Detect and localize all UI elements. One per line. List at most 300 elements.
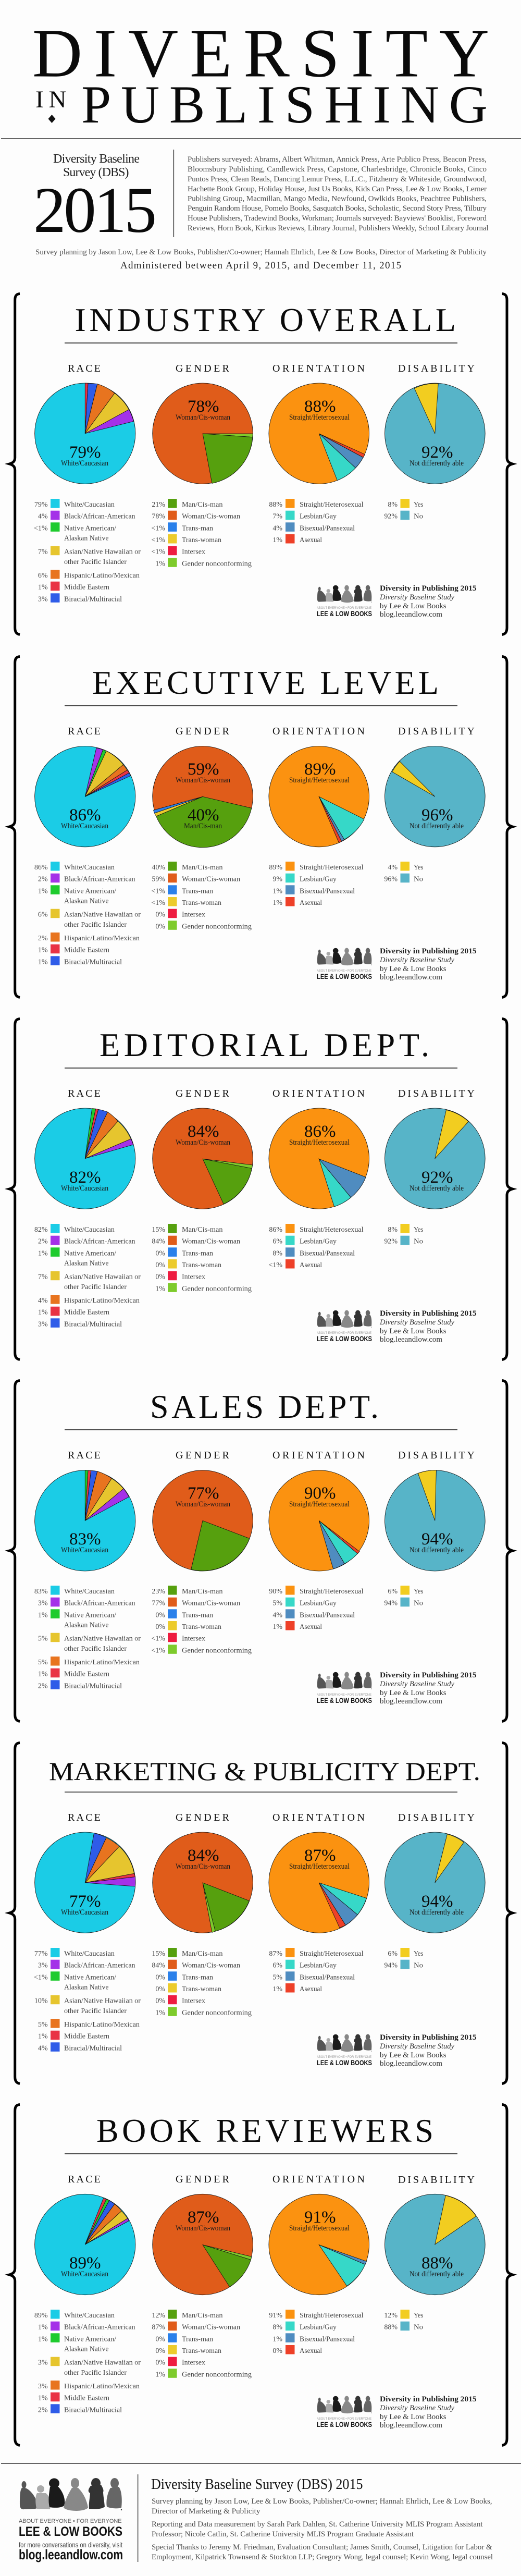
gender legend: 0% bbox=[155, 923, 165, 930]
race legend: 3% bbox=[38, 2383, 48, 2390]
gender legend: Intersex bbox=[182, 2359, 205, 2367]
race legend: Biracial/Multiracial bbox=[64, 2044, 122, 2052]
disability pie chart bbox=[385, 1832, 485, 1933]
gender legend: 0% bbox=[155, 1249, 165, 1257]
study credit: Diversity in Publishing 2015 bbox=[380, 1671, 476, 1679]
study credit: Diversity in Publishing 2015 bbox=[380, 947, 476, 955]
orientation legend: 90% bbox=[269, 1588, 282, 1596]
gender legend: <1% bbox=[151, 1635, 165, 1643]
column headings: GENDER bbox=[176, 1450, 230, 1461]
column headings: DISABILITY bbox=[398, 726, 475, 737]
disability pie chart bbox=[385, 2194, 485, 2295]
panel: sales dept bbox=[9, 1380, 513, 1721]
race legend: 1% bbox=[38, 2324, 48, 2332]
race legend: 7% bbox=[38, 548, 48, 556]
race legend: Biracial/Multiracial bbox=[64, 1320, 122, 1328]
publishers surveyed list: Reviews, Horn Book, Kirkus Reviews, Library Journal, Publishers Weekly, School Library Journal bbox=[188, 224, 489, 232]
column headings bbox=[68, 1812, 475, 1823]
race legend: 7% bbox=[38, 1273, 48, 1281]
pie value labels: 84% bbox=[188, 1122, 219, 1141]
race legend: 4% bbox=[38, 1297, 48, 1305]
footer credits bbox=[152, 2497, 493, 2561]
race legend: Biracial/Multiracial bbox=[64, 2406, 122, 2414]
race legend: other Pacific Islander bbox=[64, 2007, 127, 2015]
column headings bbox=[68, 363, 475, 374]
logo: lee and low books: ABOUT EVERYONE • FOR EVERYONE bbox=[317, 1332, 371, 1335]
study credit: by Lee & Low Books bbox=[380, 965, 446, 973]
orientation legend: Lesbian/Gay bbox=[300, 513, 337, 521]
orientation pie chart bbox=[269, 746, 369, 847]
gender legend: Man/Cis-man bbox=[182, 864, 223, 872]
pie value labels: 84% bbox=[188, 1846, 219, 1865]
panel: book reviewers bbox=[9, 2105, 513, 2446]
race legend: 2% bbox=[38, 2406, 48, 2414]
gender legend: 1% bbox=[155, 560, 165, 568]
pie value labels: 89% bbox=[69, 2254, 101, 2273]
pie value labels: Not differently able bbox=[410, 2270, 464, 2278]
disability legend bbox=[384, 1586, 423, 1608]
heading: SALES DEPT. bbox=[150, 1388, 379, 1425]
column headings: ORIENTATION bbox=[272, 2174, 365, 2185]
pie value labels: White/Caucasian bbox=[61, 1184, 109, 1193]
study credit: blog.leeandlow.com bbox=[380, 610, 442, 619]
orientation legend: 88% bbox=[269, 501, 282, 509]
pie value labels: 77% bbox=[188, 1484, 219, 1503]
column headings bbox=[68, 726, 475, 737]
publishers surveyed list: Puntos Press, Clean Reads, Dancing Lemur Press, L.L.C., Fitzhenry & Whiteside, Groundwood, bbox=[188, 175, 487, 183]
disability legend: No bbox=[414, 513, 423, 521]
heading: BOOK REVIEWERS bbox=[96, 2112, 433, 2149]
study credit: blog.leeandlow.com bbox=[380, 973, 442, 982]
race legend: Alaskan Native bbox=[64, 898, 108, 905]
gender legend: 0% bbox=[155, 1973, 165, 1981]
pie value labels: 82% bbox=[69, 1168, 101, 1187]
race legend: Middle Eastern bbox=[64, 2395, 109, 2402]
race legend: Asian/Native Hawaiian or bbox=[64, 1273, 141, 1281]
orientation legend: Lesbian/Gay bbox=[300, 1600, 337, 1608]
pie value labels bbox=[61, 1846, 464, 1917]
gender legend bbox=[152, 2310, 252, 2378]
orientation legend: Straight/Heterosexual bbox=[300, 1588, 364, 1596]
study credit: Diversity Baseline Study bbox=[379, 593, 454, 602]
study credit bbox=[379, 2395, 476, 2430]
disability legend: No bbox=[414, 1600, 423, 1608]
footer credits: Survey planning by Jason Low, Lee & Low Books, Publisher/Co-owner; Hannah Ehrlich, Lee & Low Books, bbox=[152, 2497, 492, 2506]
race legend: Hispanic/Latino/Mexican bbox=[64, 2383, 140, 2390]
disability legend: No bbox=[414, 1962, 423, 1970]
race legend: 86% bbox=[34, 864, 48, 872]
disability legend: No bbox=[414, 2324, 423, 2332]
gender legend: Woman/Cis-woman bbox=[182, 513, 240, 521]
gender legend: <1% bbox=[151, 536, 165, 544]
gender legend: Intersex bbox=[182, 548, 205, 556]
pie value labels: Straight/Heterosexual bbox=[289, 413, 350, 422]
gender pie chart bbox=[153, 746, 253, 848]
column headings: ORIENTATION bbox=[272, 726, 365, 737]
race legend: 1% bbox=[38, 1249, 48, 1257]
survey name and year: 2015 bbox=[33, 175, 157, 247]
gender legend: Trans-woman bbox=[182, 536, 221, 544]
column headings: GENDER bbox=[176, 2174, 230, 2185]
orientation legend: <1% bbox=[268, 1261, 282, 1269]
race legend: 2% bbox=[38, 1238, 48, 1246]
gender legend: 0% bbox=[155, 2347, 165, 2355]
disability legend: Yes bbox=[414, 1588, 423, 1596]
pie value labels: Straight/Heterosexual bbox=[289, 1862, 350, 1871]
gender legend: 0% bbox=[155, 2359, 165, 2367]
gender legend: Intersex bbox=[182, 1273, 205, 1281]
study credit: Diversity in Publishing 2015 bbox=[380, 584, 476, 593]
gender legend: Trans-woman bbox=[182, 1261, 221, 1269]
race legend: 77% bbox=[34, 1950, 48, 1958]
gender legend: <1% bbox=[151, 887, 165, 895]
orientation pie chart bbox=[269, 383, 369, 484]
column headings: DISABILITY bbox=[398, 1088, 475, 1099]
race legend: Alaskan Native bbox=[64, 535, 108, 542]
orientation pie chart bbox=[269, 2194, 369, 2295]
orientation legend: Bisexual/Pansexual bbox=[300, 2335, 355, 2343]
race legend: White/Caucasian bbox=[64, 1950, 115, 1958]
gender legend: 15% bbox=[152, 1950, 165, 1958]
footer logo bbox=[19, 2478, 123, 2562]
column headings: RACE bbox=[68, 1450, 101, 1461]
race legend: Biracial/Multiracial bbox=[64, 958, 122, 966]
study credit bbox=[379, 1671, 476, 1706]
gender legend: Woman/Cis-woman bbox=[182, 2324, 240, 2332]
race pie chart bbox=[35, 1470, 135, 1571]
study credit: Diversity Baseline Study bbox=[379, 2042, 454, 2051]
orientation legend: 4% bbox=[272, 1611, 282, 1619]
orientation legend: 5% bbox=[272, 1600, 282, 1608]
race legend: Hispanic/Latino/Mexican bbox=[64, 1659, 140, 1666]
study credit bbox=[379, 1309, 476, 1344]
pie value labels: 92% bbox=[421, 443, 453, 462]
disability legend: No bbox=[414, 1238, 423, 1246]
race legend: <1% bbox=[34, 524, 48, 532]
race legend: other Pacific Islander bbox=[64, 558, 127, 566]
gender legend bbox=[152, 1224, 252, 1293]
column headings: RACE bbox=[68, 363, 101, 374]
pie value labels: 94% bbox=[421, 1892, 453, 1911]
gender legend: Trans-woman bbox=[182, 1623, 221, 1631]
footer heading: Diversity Baseline Survey (DBS) 2015 bbox=[151, 2476, 363, 2493]
gender legend: Trans-man bbox=[182, 1973, 213, 1981]
administration dates: Administered between April 9, 2015, and December 11, 2015 bbox=[120, 260, 401, 271]
gender legend: 87% bbox=[152, 2324, 165, 2332]
study credit: Diversity in Publishing 2015 bbox=[380, 2395, 476, 2403]
study credit: by Lee & Low Books bbox=[380, 2051, 446, 2059]
logo: lee and low books: ABOUT EVERYONE • FOR EVERYONE bbox=[317, 2418, 371, 2421]
disability legend: 8% bbox=[388, 1226, 398, 1234]
pie value labels: White/Caucasian bbox=[61, 1908, 109, 1917]
gender legend: Man/Cis-man bbox=[182, 501, 223, 509]
orientation legend: Straight/Heterosexual bbox=[300, 864, 364, 872]
column headings: ORIENTATION bbox=[272, 363, 365, 374]
gender legend: 0% bbox=[155, 1985, 165, 1993]
race legend: Alaskan Native bbox=[64, 1259, 108, 1268]
race legend: 6% bbox=[38, 572, 48, 580]
race legend: Native American/ bbox=[64, 524, 116, 532]
heading: EDITORIAL DEPT. bbox=[100, 1026, 429, 1063]
pie value labels: White/Caucasian bbox=[61, 822, 109, 830]
race legend: Hispanic/Latino/Mexican bbox=[64, 572, 140, 580]
race legend: Native American/ bbox=[64, 1249, 116, 1257]
race legend: Middle Eastern bbox=[64, 947, 109, 954]
logo: lee and low books: ABOUT EVERYONE • FOR EVERYONE bbox=[317, 607, 371, 610]
pie value labels: 96% bbox=[421, 806, 453, 825]
gender legend: <1% bbox=[151, 524, 165, 532]
gender legend: Trans-man bbox=[182, 887, 213, 895]
race legend: other Pacific Islander bbox=[64, 2369, 127, 2377]
race legend: 5% bbox=[38, 1635, 48, 1643]
pie value labels: Woman/Cis-woman bbox=[176, 776, 231, 784]
race legend: 1% bbox=[38, 947, 48, 954]
orientation legend: Asexual bbox=[300, 1985, 322, 1993]
race legend: other Pacific Islander bbox=[64, 1283, 127, 1291]
race legend: 1% bbox=[38, 958, 48, 966]
orientation legend: Bisexual/Pansexual bbox=[300, 524, 355, 532]
gender legend: Gender nonconforming bbox=[182, 923, 252, 930]
race legend: 5% bbox=[38, 1659, 48, 1666]
gender legend: <1% bbox=[151, 899, 165, 907]
pie value labels: 89% bbox=[304, 760, 336, 779]
pie value labels: Straight/Heterosexual bbox=[289, 776, 350, 784]
race legend: 6% bbox=[38, 911, 48, 919]
race legend: Asian/Native Hawaiian or bbox=[64, 1635, 141, 1643]
logo: lee and low books: ABOUT EVERYONE • FOR EVERYONE bbox=[317, 2056, 371, 2059]
gender legend: Trans-man bbox=[182, 2335, 213, 2343]
orientation legend: Bisexual/Pansexual bbox=[300, 1611, 355, 1619]
pie value labels: 92% bbox=[421, 1168, 453, 1187]
race legend bbox=[34, 1586, 141, 1690]
race legend: 3% bbox=[38, 595, 48, 603]
orientation legend: Lesbian/Gay bbox=[300, 2324, 337, 2332]
race legend: 2% bbox=[38, 1682, 48, 1690]
logo: lee and low books: LEE & LOW BOOKS bbox=[317, 972, 372, 980]
column headings: RACE bbox=[68, 2174, 101, 2185]
gender legend: Gender nonconforming bbox=[182, 560, 252, 568]
orientation legend: 87% bbox=[269, 1950, 282, 1958]
logo: lee and low books: LEE & LOW BOOKS bbox=[317, 2420, 372, 2428]
gender legend: 0% bbox=[155, 911, 165, 919]
orientation pie chart bbox=[269, 1832, 369, 1933]
gender legend: Intersex bbox=[182, 1997, 205, 2005]
pie value labels: 90% bbox=[304, 1484, 336, 1503]
race legend: Asian/Native Hawaiian or bbox=[64, 548, 141, 556]
race legend: Black/African-American bbox=[64, 1962, 135, 1970]
column headings: GENDER bbox=[176, 1088, 230, 1099]
column headings bbox=[68, 1088, 475, 1099]
orientation legend: Bisexual/Pansexual bbox=[300, 887, 355, 895]
gender legend: Trans-man bbox=[182, 1249, 213, 1257]
race legend bbox=[34, 1224, 141, 1328]
gender legend: 1% bbox=[155, 2009, 165, 2017]
gender legend: Gender nonconforming bbox=[182, 2371, 252, 2378]
race legend: White/Caucasian bbox=[64, 864, 115, 872]
gender pie chart bbox=[153, 1108, 253, 1209]
study credit: by Lee & Low Books bbox=[380, 2413, 446, 2421]
orientation legend: Asexual bbox=[300, 1623, 322, 1631]
study credit: by Lee & Low Books bbox=[380, 1327, 446, 1335]
study credit: Diversity Baseline Study bbox=[379, 1318, 454, 1327]
race legend: Native American/ bbox=[64, 1611, 116, 1619]
race pie chart bbox=[35, 383, 135, 484]
title: in: IN bbox=[35, 86, 67, 113]
gender legend: Woman/Cis-woman bbox=[182, 1600, 240, 1608]
gender legend: 78% bbox=[152, 513, 165, 521]
orientation legend: 1% bbox=[272, 1985, 282, 1993]
orientation legend: Bisexual/Pansexual bbox=[300, 1249, 355, 1257]
panel: industry overall bbox=[9, 294, 513, 635]
orientation legend bbox=[268, 1224, 364, 1269]
publishers surveyed list: Hachette Book Group, Holiday House, Just Us Books, Kids Can Press, Lee & Low Books, Lerner bbox=[188, 185, 487, 193]
race legend: Black/African-American bbox=[64, 876, 135, 884]
gender legend bbox=[152, 1948, 252, 2017]
gender legend: Gender nonconforming bbox=[182, 2009, 252, 2017]
publishers surveyed list bbox=[188, 155, 489, 232]
race legend: Asian/Native Hawaiian or bbox=[64, 1997, 141, 2005]
orientation legend: 86% bbox=[269, 1226, 282, 1234]
disability legend bbox=[384, 2310, 423, 2332]
pie value labels: Woman/Cis-woman bbox=[176, 1500, 231, 1508]
orientation legend: Asexual bbox=[300, 1261, 322, 1269]
gender legend: Intersex bbox=[182, 911, 205, 919]
orientation legend: Lesbian/Gay bbox=[300, 1238, 337, 1246]
race legend bbox=[34, 2310, 141, 2414]
race legend: 3% bbox=[38, 1320, 48, 1328]
disability legend: 88% bbox=[384, 2324, 398, 2332]
heading: MARKETING & PUBLICITY DEPT. bbox=[49, 1757, 480, 1786]
gender legend: 12% bbox=[152, 2312, 165, 2320]
survey name and year: Survey (DBS) bbox=[63, 166, 129, 179]
footer credits: Special Thanks to Jeremy M. Friedman, Evaluation Consultant; James Smith, Counsel, Litigation for Labor & bbox=[152, 2543, 492, 2552]
disability legend: Yes bbox=[414, 864, 423, 872]
gender legend: 84% bbox=[152, 1238, 165, 1246]
study credit: Diversity Baseline Study bbox=[379, 956, 454, 964]
pie value labels: 86% bbox=[304, 1122, 336, 1141]
disability pie chart bbox=[385, 383, 485, 484]
gender legend: Trans-woman bbox=[182, 2347, 221, 2355]
orientation legend: 1% bbox=[272, 899, 282, 907]
pie value labels: White/Caucasian bbox=[61, 2270, 109, 2278]
logo: lee and low books: LEE & LOW BOOKS bbox=[317, 609, 372, 618]
race legend: <1% bbox=[34, 1973, 48, 1981]
logo: lee and low books bbox=[317, 1310, 372, 1343]
race legend: Asian/Native Hawaiian or bbox=[64, 2359, 141, 2367]
study credit: Diversity Baseline Study bbox=[379, 2404, 454, 2412]
race legend: 3% bbox=[38, 2359, 48, 2367]
race legend: Native American/ bbox=[64, 2335, 116, 2343]
orientation legend: 7% bbox=[272, 513, 282, 521]
panel: executive level bbox=[9, 657, 513, 998]
footer logo: blog.leeandlow.com bbox=[19, 2547, 123, 2562]
orientation legend bbox=[269, 499, 364, 544]
gender pie chart bbox=[153, 1470, 253, 1571]
gender legend: Man/Cis-man bbox=[182, 1588, 223, 1596]
orientation legend: 1% bbox=[272, 1623, 282, 1631]
gender legend: Woman/Cis-woman bbox=[182, 876, 240, 884]
race pie chart bbox=[35, 1832, 135, 1933]
race legend: Middle Eastern bbox=[64, 584, 109, 592]
orientation pie chart bbox=[269, 1470, 369, 1571]
pie value labels: 79% bbox=[69, 443, 101, 462]
race legend: Biracial/Multiracial bbox=[64, 595, 122, 603]
race legend: 79% bbox=[34, 501, 48, 509]
orientation legend: 8% bbox=[272, 1249, 282, 1257]
race legend: 1% bbox=[38, 2395, 48, 2402]
race legend: 1% bbox=[38, 2335, 48, 2343]
orientation legend: 1% bbox=[272, 2335, 282, 2343]
footer credits: Professor; Nicole Catlin, St. Catherine University MLIS Program Graduate Assistant bbox=[152, 2530, 414, 2538]
study credit: Diversity Baseline Study bbox=[379, 1680, 454, 1688]
orientation legend: 0% bbox=[272, 2347, 282, 2355]
gender pie chart bbox=[153, 2194, 253, 2295]
gender legend: <1% bbox=[151, 548, 165, 556]
disability legend: 96% bbox=[384, 876, 398, 884]
disability legend: 6% bbox=[388, 1588, 398, 1596]
race legend: 3% bbox=[38, 1600, 48, 1608]
race legend bbox=[34, 499, 141, 603]
race legend: Black/African-American bbox=[64, 1238, 135, 1246]
publishers surveyed list: Bloomsbury Publishing, Candlewick Press, Capstone, Charlesbridge, Chronicle Books, Cinco bbox=[188, 165, 487, 174]
orientation pie chart bbox=[269, 1108, 369, 1209]
gender legend: 1% bbox=[155, 2371, 165, 2378]
disability legend: 8% bbox=[388, 501, 398, 509]
gender legend: 0% bbox=[155, 1261, 165, 1269]
orientation legend: Straight/Heterosexual bbox=[300, 2312, 364, 2320]
gender legend: Trans-woman bbox=[182, 899, 221, 907]
logo: lee and low books: LEE & LOW BOOKS bbox=[317, 2058, 372, 2067]
pie value labels: 59% bbox=[188, 760, 219, 779]
pie value labels: Straight/Heterosexual bbox=[289, 1138, 350, 1147]
study credit: by Lee & Low Books bbox=[380, 602, 446, 610]
orientation legend bbox=[269, 1948, 364, 1993]
survey name and year: Diversity Baseline bbox=[53, 152, 140, 166]
logo: lee and low books: ABOUT EVERYONE • FOR EVERYONE bbox=[317, 970, 371, 973]
pie value labels: White/Caucasian bbox=[61, 459, 109, 468]
disability legend: No bbox=[414, 876, 423, 884]
gender legend: Man/Cis-man bbox=[182, 1950, 223, 1958]
pie value labels bbox=[61, 760, 464, 830]
gender legend: Gender nonconforming bbox=[182, 1285, 252, 1293]
pie value labels: 77% bbox=[69, 1892, 101, 1911]
study credit: blog.leeandlow.com bbox=[380, 2059, 442, 2068]
study credit: Diversity in Publishing 2015 bbox=[380, 2033, 476, 2042]
gender legend: 15% bbox=[152, 1226, 165, 1234]
footer credits: Director of Marketing & Publicity bbox=[152, 2507, 260, 2516]
gender pie chart bbox=[153, 1832, 253, 1933]
footer credits: Reporting and Data measurement by Sarah Park Dahlen, St. Catherine University MLIS Program Assistant bbox=[152, 2520, 483, 2529]
gender legend: 0% bbox=[155, 1623, 165, 1631]
gender legend: 0% bbox=[155, 2335, 165, 2343]
disability pie chart bbox=[385, 1108, 485, 1209]
race legend: 5% bbox=[38, 2021, 48, 2029]
orientation legend: Straight/Heterosexual bbox=[300, 1950, 364, 1958]
pie value labels: Woman/Cis-woman bbox=[176, 1138, 231, 1147]
pie value labels: Not differently able bbox=[410, 459, 464, 468]
race legend: Alaskan Native bbox=[64, 2346, 108, 2353]
gender legend: 23% bbox=[152, 1588, 165, 1596]
disability legend: Yes bbox=[414, 2312, 423, 2320]
footer logo: ABOUT EVERYONE • FOR EVERYONE bbox=[19, 2518, 122, 2524]
pie value labels: Woman/Cis-woman bbox=[176, 1862, 231, 1871]
logo: lee and low books bbox=[317, 585, 372, 618]
study credit: blog.leeandlow.com bbox=[380, 1697, 442, 1706]
gender legend: 84% bbox=[152, 1962, 165, 1970]
study credit: blog.leeandlow.com bbox=[380, 1335, 442, 1344]
masthead bbox=[1, 15, 521, 271]
column headings: RACE bbox=[68, 726, 101, 737]
